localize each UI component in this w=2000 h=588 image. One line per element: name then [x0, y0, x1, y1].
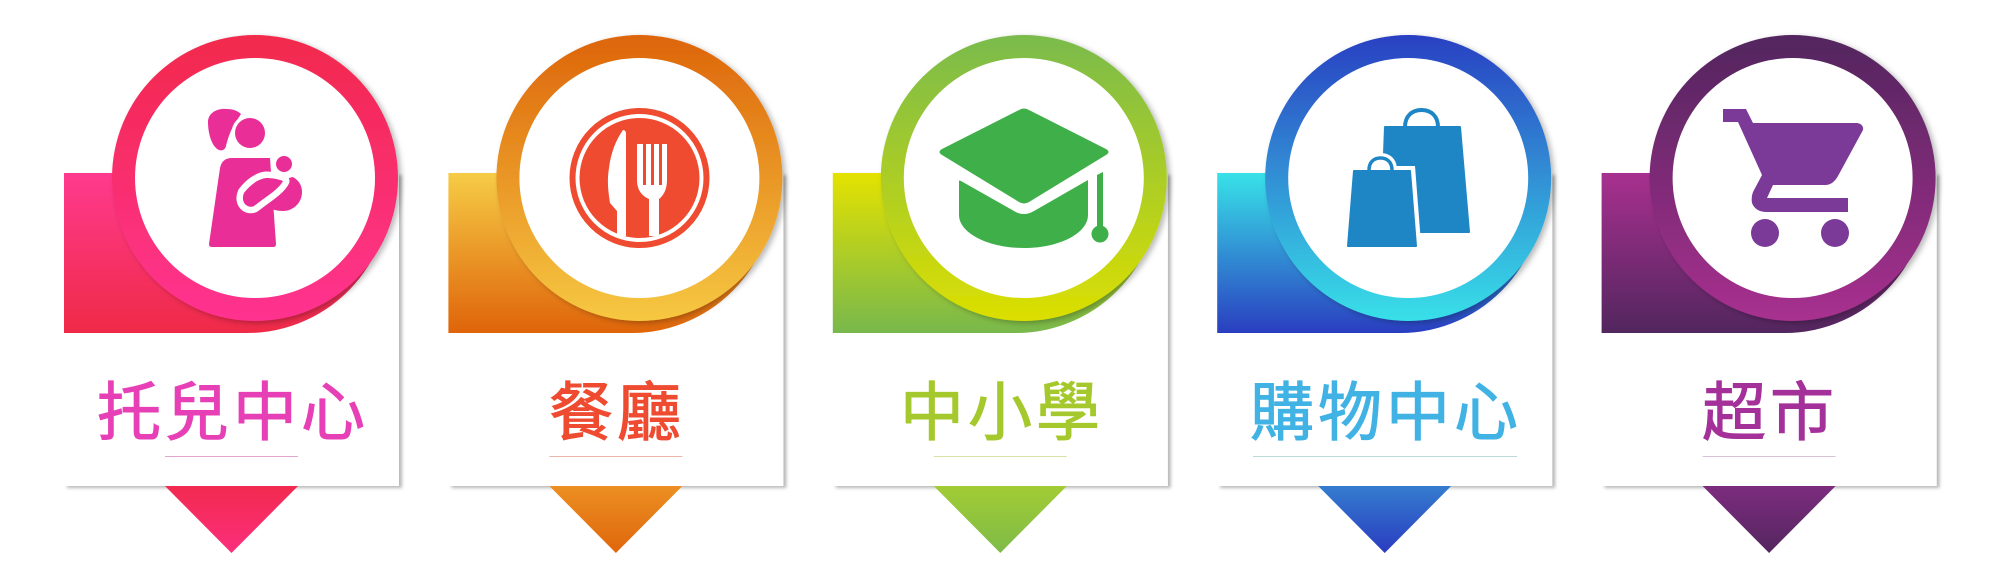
panel: supermarket	[1602, 35, 1937, 553]
heading: 中小學	[900, 377, 1104, 449]
heading: 托兒中心	[97, 377, 369, 449]
icon: knife and fork	[572, 111, 706, 245]
heading: 購物中心	[1250, 377, 1522, 449]
colour tab	[1602, 173, 1928, 333]
panel: shopping mall	[1217, 35, 1552, 553]
heading: 超市	[1702, 377, 1838, 449]
panel card	[1217, 173, 1552, 486]
panel card	[448, 173, 783, 486]
colour tab	[833, 173, 1159, 333]
panel: childcare centre	[64, 35, 399, 553]
pointer triangle	[1703, 486, 1836, 553]
icon: shopping cart	[1723, 109, 1863, 247]
icon: graduation cap	[940, 108, 1108, 248]
panel card	[1602, 173, 1937, 486]
panel card	[64, 173, 399, 486]
colour tab	[448, 173, 774, 333]
pointer triangle	[165, 486, 298, 553]
icon ring	[112, 35, 398, 321]
icon ring	[496, 35, 782, 321]
pointer triangle	[934, 486, 1067, 553]
heading: 餐廳	[549, 377, 685, 449]
panel: restaurant	[448, 35, 783, 553]
panel card	[833, 173, 1168, 486]
pointer triangle	[549, 486, 682, 553]
icon: shopping bags	[1342, 110, 1470, 250]
icon ring	[1265, 35, 1551, 321]
colour tab	[1217, 173, 1543, 333]
icon ring	[1650, 35, 1936, 321]
icon ring	[881, 35, 1167, 321]
pointer triangle	[1318, 486, 1451, 553]
panel: schools	[833, 35, 1168, 553]
icon: mother and baby	[208, 109, 302, 247]
colour tab	[64, 173, 390, 333]
